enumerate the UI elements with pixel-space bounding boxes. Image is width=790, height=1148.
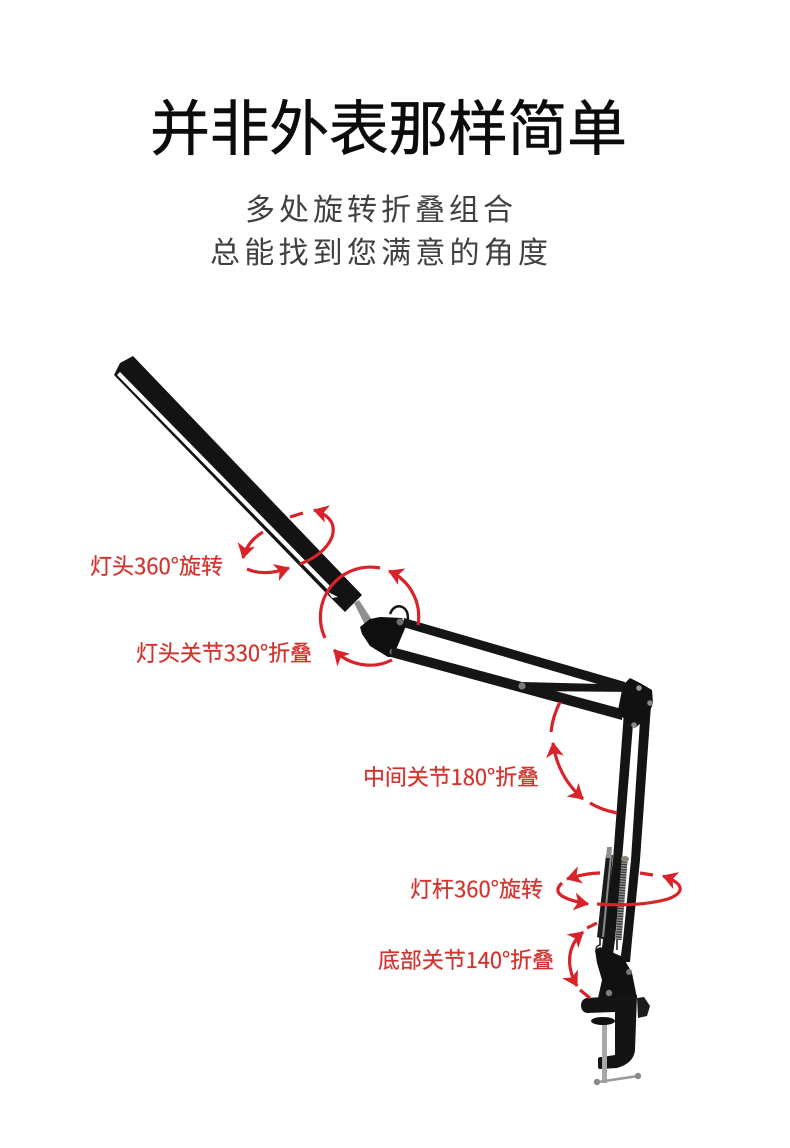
arrow: middle joint [551, 702, 617, 813]
label: head joint: 灯头关节330°折叠 [136, 636, 312, 668]
lower arm [391, 647, 622, 720]
middle joint plate [618, 678, 653, 728]
desk clamp [581, 995, 650, 1069]
metal connector [354, 600, 372, 625]
link bar [518, 682, 640, 692]
lamp head bar [114, 356, 362, 612]
label: pole rotation: 灯杆360°旋转 [410, 872, 543, 904]
label: head rotation: 灯头360°旋转 [90, 549, 223, 581]
arrow: pole rotation [558, 873, 680, 905]
subtitle: 多处旋转折叠组合 [245, 185, 513, 229]
arrow: head joint [320, 567, 419, 665]
title: 并非外表那样简单 [150, 81, 627, 168]
label: middle joint: 中间关节180°折叠 [363, 760, 539, 792]
arrow: head rotation [243, 510, 333, 573]
lower arms [600, 705, 651, 962]
lamp product photo [114, 356, 653, 1085]
subtitle [210, 185, 548, 272]
head joint plate [360, 606, 408, 657]
spring and gas strut [596, 847, 629, 951]
clamp screw [591, 1017, 641, 1085]
arrow: base joint [570, 923, 597, 998]
label: base joint: 底部关节140°折叠 [378, 943, 554, 975]
subtitle: 总能找到您满意的角度 [210, 228, 548, 272]
base bracket [595, 947, 637, 998]
upper arm [403, 618, 625, 692]
